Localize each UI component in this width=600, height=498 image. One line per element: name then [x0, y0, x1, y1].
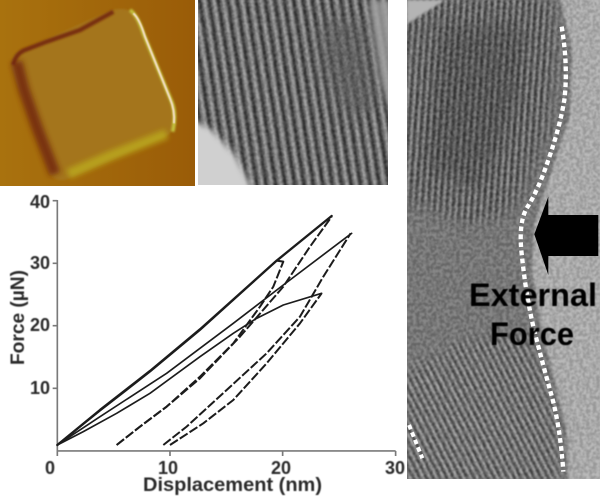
- label: External Force: [470, 282, 596, 346]
- chart: force versus displacement: [8, 192, 405, 496]
- x axis tick labels: [45, 458, 405, 478]
- x axis tick labels: 10: [158, 458, 178, 478]
- axes: [53, 200, 396, 456]
- y axis tick labels: [30, 192, 50, 398]
- y axis tick labels: 40: [30, 192, 50, 212]
- dotted outline: right edge: [521, 27, 566, 472]
- icon: crystal body: [10, 9, 175, 180]
- y axis tick labels: 20: [30, 315, 50, 335]
- unloading curves (dashed): [117, 217, 351, 445]
- panel: AFM image of square crystal: [0, 0, 195, 186]
- arrow: external force: [534, 197, 598, 275]
- dotted outline: lower left edge: [409, 425, 422, 458]
- y axis tick labels: 30: [30, 253, 50, 273]
- x axis tick labels: 0: [45, 458, 55, 478]
- y axis title: Force (µN): [8, 270, 29, 365]
- loading curves (solid): [57, 216, 352, 445]
- x axis title: Displacement (nm): [143, 474, 322, 496]
- panel: TEM lattice fringes: [198, 0, 388, 185]
- label: External Force: External: [469, 277, 597, 313]
- label: External Force: Force: [490, 316, 574, 352]
- x axis tick labels: 20: [271, 458, 291, 478]
- panel: TEM image under external force: [400, 0, 600, 490]
- y axis tick labels: 10: [30, 378, 50, 398]
- x axis tick labels: 30: [385, 458, 405, 478]
